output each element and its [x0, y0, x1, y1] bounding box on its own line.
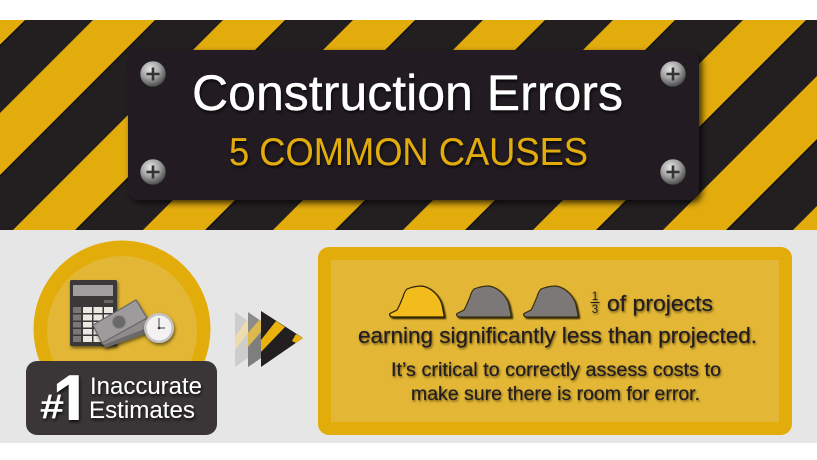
fraction one third: 3: [592, 304, 598, 316]
icon: calculator: [70, 280, 117, 346]
explanation line two: make sure there is room for error.: [411, 384, 700, 405]
icon: screw bottom right: [660, 159, 686, 185]
inner circle: [47, 256, 197, 406]
explanation line one: It’s critical to correctly assess costs to: [391, 360, 721, 381]
icon: screw top left: [140, 61, 166, 87]
stat text line two: earning significantly less than projected.: [358, 323, 757, 348]
number label box: [26, 361, 217, 435]
arrow: striped triple chevron: [235, 311, 303, 367]
fraction one third: 1: [592, 291, 598, 303]
cause name: Inaccurate: [90, 373, 202, 400]
icon: yellow hard hat: [390, 286, 444, 317]
icon: banknotes: [93, 300, 148, 348]
inner panel: [331, 260, 779, 422]
rank number: 1: [52, 358, 92, 446]
subtitle: 5 COMMON CAUSES: [229, 131, 588, 174]
cause name: Estimates: [89, 397, 195, 424]
cause name: [89, 373, 202, 424]
stat text line one: of projects: [607, 291, 713, 316]
icon: screw bottom left: [140, 159, 166, 185]
icon: clock: [144, 313, 174, 343]
title: Construction Errors: [192, 65, 623, 121]
hazard stripe header band: [0, 20, 817, 230]
panel: statistic callout: [318, 247, 792, 435]
icon: screw top right: [660, 61, 686, 87]
title plate: [128, 50, 699, 200]
icon: grey hard hat: [457, 286, 511, 317]
outer circle: [34, 240, 210, 418]
panel: cause icon badge: [26, 240, 217, 446]
rank number: #: [41, 388, 64, 425]
fraction one third: [590, 291, 600, 316]
grey content band: [0, 230, 817, 443]
rank number: [40, 375, 81, 424]
icon: grey hard hat: [524, 286, 578, 317]
